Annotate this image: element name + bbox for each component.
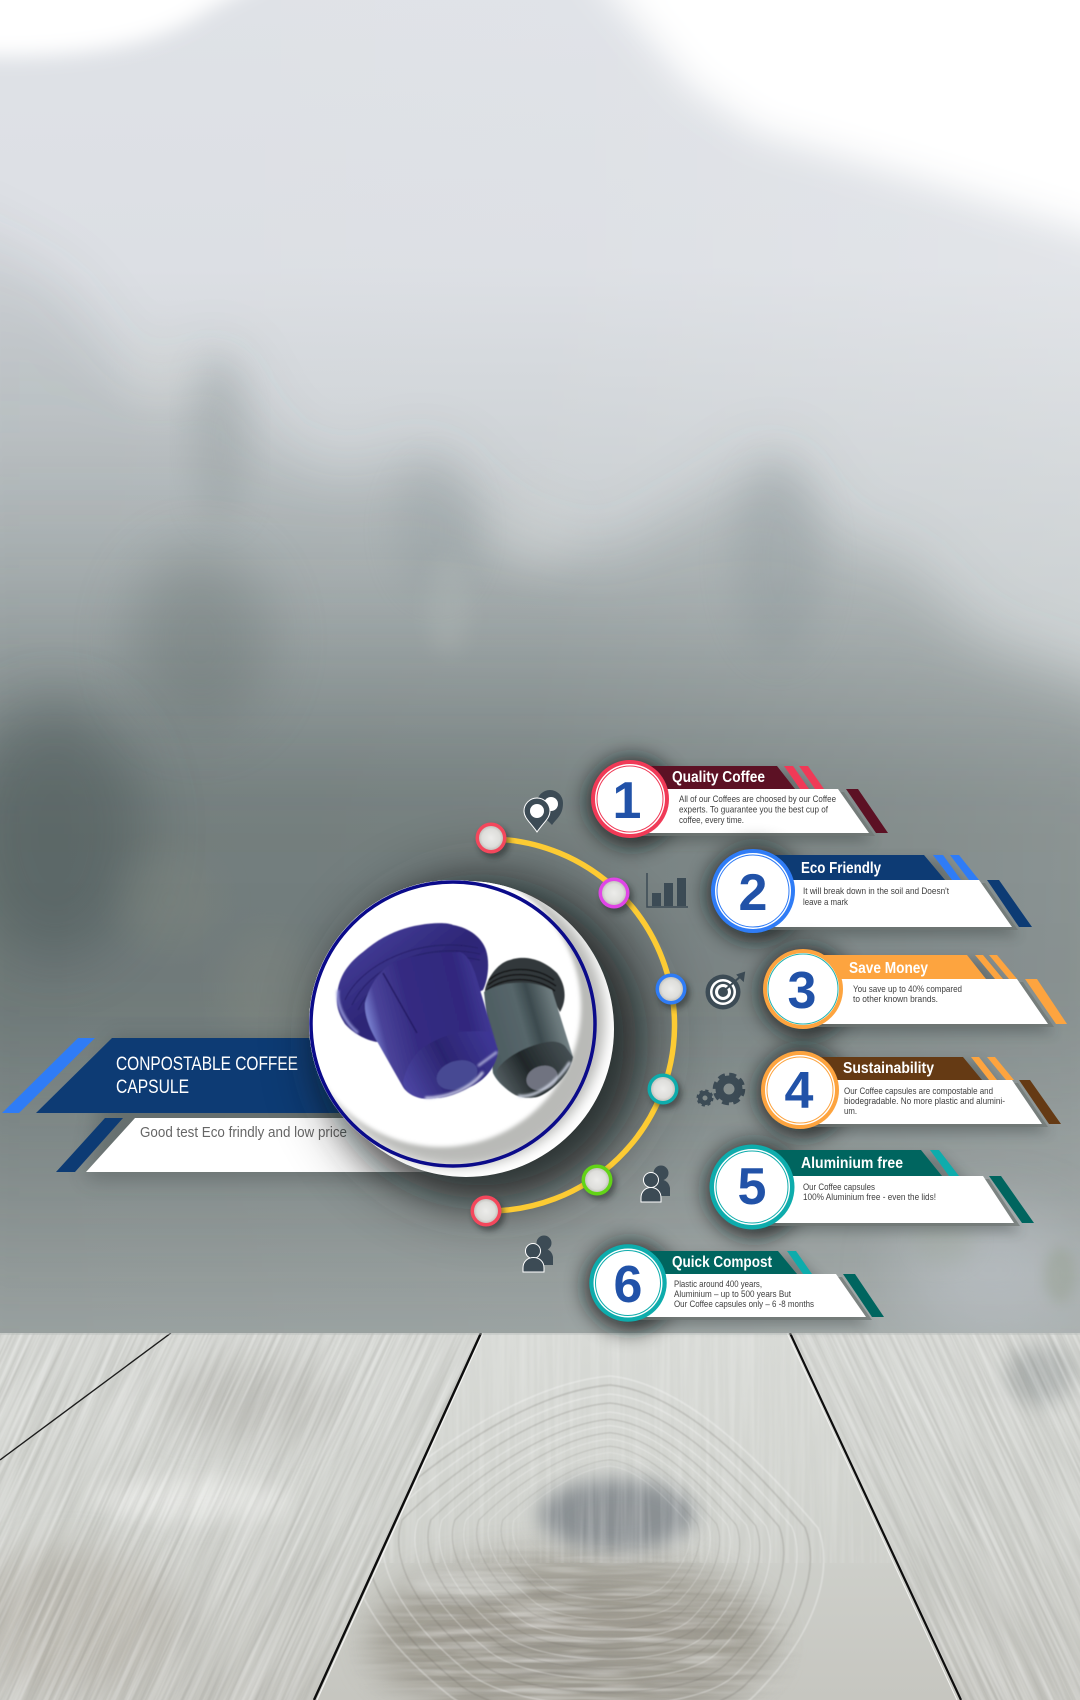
card 2: Eco Friendly: 2 — [739, 864, 767, 922]
navy ring — [311, 882, 595, 1166]
title band — [803, 955, 986, 979]
main banner: title: CAPSULE — [116, 1077, 189, 1098]
card 5: Aluminium free: 100% Aluminium free - even the lids! — [803, 1192, 936, 1202]
number badge — [763, 949, 843, 1029]
white subtitle band — [86, 1118, 480, 1172]
yellow arc timeline — [486, 839, 675, 1211]
white body panel — [763, 883, 1018, 930]
white body panel — [762, 1179, 1020, 1226]
number badge — [710, 1144, 794, 1230]
white body panel — [640, 792, 875, 836]
card title: Aluminium free — [801, 1155, 903, 1172]
title band — [630, 766, 795, 789]
title band — [800, 1057, 982, 1080]
number badge — [591, 760, 669, 838]
central disc shadow — [318, 868, 662, 1212]
title band — [753, 855, 945, 880]
card title: Eco Friendly — [801, 860, 881, 877]
capsule: blue — [337, 923, 498, 1099]
card 6: Quick Compost: 6 — [614, 1256, 642, 1314]
icon: target — [706, 973, 744, 1010]
card 4: Sustainability: biodegradable. No more plastic and alumini- — [844, 1096, 1005, 1106]
number badge — [589, 1244, 667, 1322]
card 1: Quality Coffee — [586, 756, 888, 848]
icon: people (quick compost) — [523, 1236, 553, 1272]
central disc with coffee capsules — [309, 880, 614, 1177]
card 3: Save Money: to other known brands. — [853, 994, 938, 1004]
number badge — [761, 1051, 839, 1129]
heading text: CONPOSTABLE COFFEE — [116, 1054, 298, 1075]
card 4: Sustainability: 4 — [785, 1062, 814, 1120]
card text: Our Coffee capsules — [803, 1182, 875, 1192]
title band — [628, 1251, 797, 1274]
card title: Sustainability — [843, 1060, 934, 1077]
icon: people (aluminium free) — [641, 1166, 670, 1202]
navy title band — [36, 1038, 400, 1113]
icon: map pins — [524, 790, 563, 832]
navy accent stripe — [56, 1118, 123, 1172]
card text: Our Coffee capsules are compostable and — [844, 1086, 993, 1096]
card 4: Sustainability — [756, 1047, 1061, 1139]
card 1: Quality Coffee: 1 — [613, 772, 641, 830]
card title: Quick Compost — [672, 1254, 772, 1271]
card 3: Save Money: 3 — [788, 962, 816, 1020]
white disc — [309, 880, 614, 1177]
card 2: Eco Friendly — [706, 845, 1032, 943]
card 3: Save Money — [758, 945, 1067, 1039]
capsule: dark — [484, 958, 573, 1098]
card text: Plastic around 400 years, — [674, 1279, 762, 1289]
node 1: red — [476, 822, 510, 858]
number badge — [711, 849, 795, 933]
icon: gears — [698, 1076, 742, 1105]
node 3: blue — [656, 974, 690, 1009]
card title: Save Money — [849, 960, 928, 977]
card 5: Aluminium free: 5 — [738, 1158, 766, 1216]
node 2: magenta — [598, 878, 633, 913]
white body panel — [813, 982, 1054, 1027]
card 6: Quick Compost — [584, 1240, 884, 1332]
card title: Quality Coffee — [672, 769, 765, 786]
banner shadow — [86, 1038, 400, 1180]
main banner: title — [2, 1038, 480, 1180]
bright accent stripe — [2, 1038, 95, 1113]
card 1: Quality Coffee: coffee, every time. — [679, 815, 744, 825]
card 1: Quality Coffee: experts. To guarantee you the best cup of — [679, 804, 828, 814]
card 6: Quick Compost: Our Coffee capsules only – 6 -8 months — [674, 1299, 814, 1309]
icon: bar chart — [647, 873, 688, 907]
subtitle text: Good test Eco frindly and low price — [140, 1124, 347, 1141]
card text: You save up to 40% compared — [853, 984, 962, 994]
card 5: Aluminium free — [705, 1141, 1034, 1239]
card 6: Quick Compost: Aluminium – up to 500 years But — [674, 1289, 791, 1299]
node 5: green — [582, 1164, 616, 1200]
node 6: red — [470, 1196, 505, 1231]
table: wood planks — [0, 1331, 1080, 1700]
card text: All of our Coffees are choosed by our Coffee — [679, 794, 836, 804]
title band — [752, 1150, 942, 1176]
card 4: Sustainability: um. — [844, 1106, 857, 1116]
card 2: Eco Friendly: leave a mark — [803, 897, 848, 907]
card text: It will break down in the soil and Doesn't — [803, 886, 949, 896]
white body panel — [810, 1083, 1048, 1127]
white body panel — [638, 1277, 872, 1320]
node 4: teal — [648, 1074, 682, 1109]
